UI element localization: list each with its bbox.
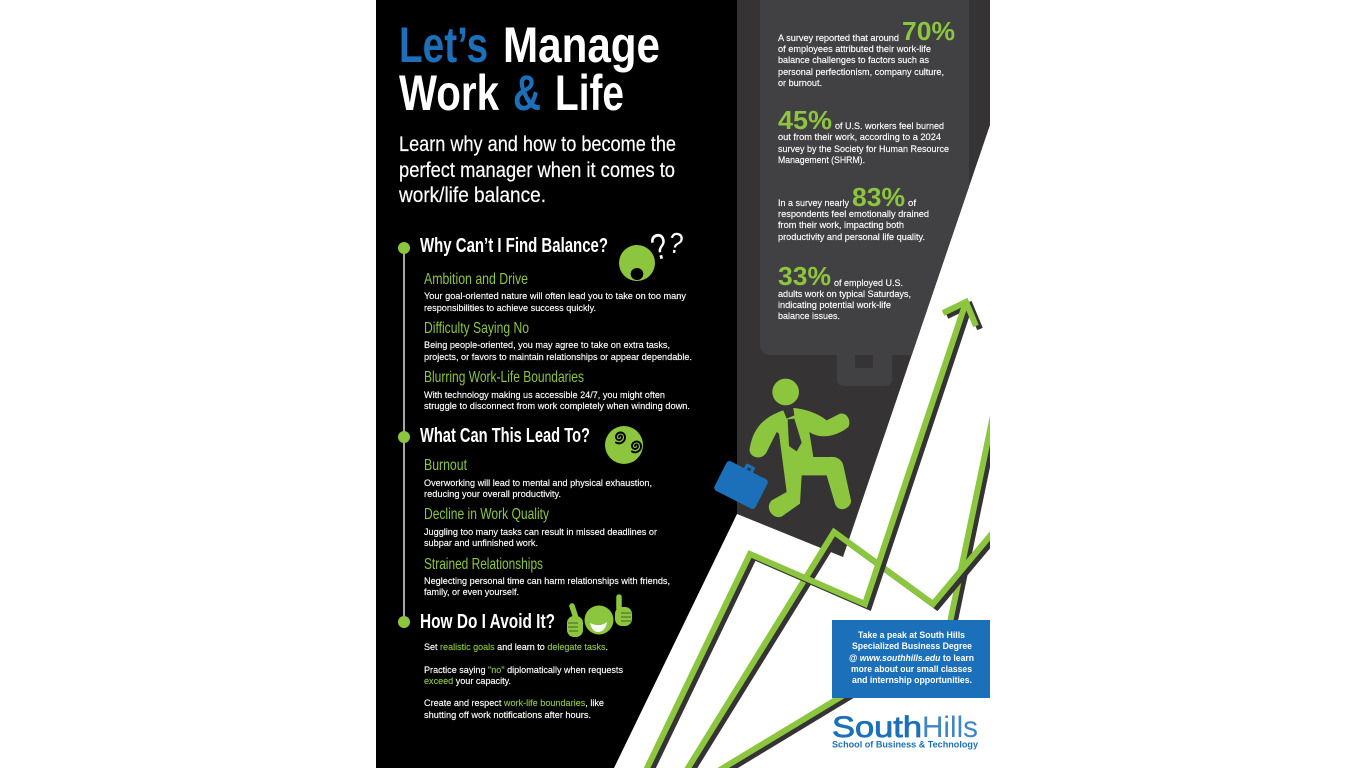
heading: what can this lead to: What Can This Lead To? [420,424,590,447]
panel: blue call to action box: Specialized Business Degree [852,641,972,652]
icon: confused face with question marks [619,232,683,281]
stat: 33 percent: 33% [778,263,831,291]
stat: 70 percent: 70% [902,18,955,46]
panel: blue call to action box: and internship opportunities. [852,675,972,686]
section text: how do I avoid it: Practice saying "no" diplomatically when requests [424,664,623,675]
stat: 83 percent: 83% [852,184,905,212]
stat: 70 percent: or burnout. [778,77,822,88]
stat: 70 percent: personal perfectionism, company culture, [778,66,944,77]
logo: South Hills School of Business and Technology: Hills [922,711,978,744]
section text: why can't I find balance: Ambition and Drive [424,271,528,288]
logo: South Hills School of Business and Technology: South [832,711,922,744]
title: Manage [503,17,660,73]
chart: rising trend line three [717,416,990,768]
section text: why can't I find balance: struggle to disconnect from work completely when winding down. [424,400,690,411]
stat: 45 percent: out from their work, according to a 2024 [778,131,941,142]
section text: what can this lead to: Strained Relationships [424,556,543,573]
icon: blue briefcase [714,461,768,509]
section text: what can this lead to [424,457,670,597]
panel: blue call to action box: Take a peak at South Hills [858,630,965,641]
stat: 33 percent: of employed U.S. [834,277,903,288]
section text: what can this lead to: subpar and unfinished work. [424,537,538,548]
stat: 45 percent: 45% [778,107,832,135]
section text: why can't I find balance [424,271,692,411]
stat: 45 percent: Management (SHRM). [778,154,865,165]
stat: 83 percent: of [908,197,916,208]
section text: what can this lead to: Burnout [424,457,467,474]
stat: 70 percent: of employees attributed their work-life [778,43,931,54]
title: & [513,65,541,121]
section text: why can't I find balance: Your goal-oriented nature will often lead you to take on too many [424,290,686,301]
section text: why can't I find balance: Being people-oriented, you may agree to take on extra tasks, [424,339,670,350]
section text: why can't I find balance: With technology making us accessible 24/7, you might often [424,389,665,400]
section text: how do I avoid it: shutting off work notifications after hours. [424,709,591,720]
heading: how do I avoid it: How Do I Avoid It? [420,610,555,633]
section text: how do I avoid it: Set realistic goals and learn to delegate tasks. [424,641,608,652]
chart: rising trend line two [675,524,1004,768]
stat: 33 percent: indicating potential work-life [778,299,891,310]
subtitle text block: Learn why and how to become the [399,132,676,156]
arrow: rising trend line one with arrowhead [637,302,980,768]
section text: how do I avoid it [424,641,623,720]
icon: confused face with question marks: ? [646,225,672,268]
stat: 33 percent: adults work on typical Saturdays, [778,288,911,299]
stat: 45 percent: of U.S. workers feel burned [835,120,944,131]
title: Work [399,65,499,121]
section text: why can't I find balance: projects, or favors to maintain relationships or appear dependable. [424,351,692,362]
stat: 70 percent: A survey reported that around [778,32,899,43]
subtitle text block: perfect manager when it comes to [399,158,675,182]
panel: dark grey right background [737,0,990,557]
section text: why can't I find balance: Difficulty Saying No [424,320,529,337]
icon: dizzy face with spiral eyes [605,426,643,464]
section text: what can this lead to: family, or even yourself. [424,586,519,597]
panel: blue call to action box: @ www.southhills.edu to learn [849,653,974,664]
panel: black left background [376,0,737,768]
panel: statistics card with clip [760,0,969,386]
stat: 83 percent: from their work, impacting both [778,219,904,230]
section text: what can this lead to: Neglecting personal time can harm relationships with friends, [424,575,670,586]
section text: why can't I find balance: responsibilities to achieve success quickly. [424,302,596,313]
stat: 33 percent [778,263,911,321]
stat: 45 percent: survey by the Society for Human Resource [778,143,949,154]
heading: why can't I find balance: Why Can’t I Find Balance? [420,234,608,257]
section text: how do I avoid it: Create and respect work-life boundaries, like [424,697,604,708]
section text: what can this lead to: reducing your overall productivity. [424,488,561,499]
section text: what can this lead to: Overworking will lead to mental and physical exhaustion, [424,477,652,488]
title: Life [555,65,624,121]
timeline with three node dots [398,242,410,628]
icon: confused face with question marks: ? [666,227,685,261]
section text: what can this lead to: Decline in Work Quality [424,506,549,523]
logo: South Hills School of Business and Technology [832,715,978,750]
stat: 33 percent: balance issues. [778,310,840,321]
section text: why can't I find balance: Blurring Work-Life Boundaries [424,369,584,386]
subtitle text block: work/life balance. [398,183,546,207]
panel: blue call to action box [832,620,990,698]
stat: 45 percent [778,107,949,165]
stat: 83 percent [778,184,929,242]
stat: 70 percent [778,18,955,88]
icon: smiling face with two thumbs up [567,597,632,637]
panel: blue call to action box: more about our small classes [851,664,972,675]
logo: South Hills School of Business and Technology: School of Business & Technology [832,740,979,750]
stat: 70 percent: balance challenges to factors such as [778,54,929,65]
title [399,28,658,110]
stat: 83 percent: productivity and personal life quality. [778,231,925,242]
stat: 83 percent: In a survey nearly [778,197,849,208]
title: Let’s [399,17,488,73]
stat: 83 percent: respondents feel emotionally drained [778,208,929,219]
icon: running businessman [750,379,851,517]
section text: how do I avoid it: exceed your capacity. [424,675,511,686]
subtitle text block [398,135,676,202]
section text: what can this lead to: Juggling too many tasks can result in missed deadlines or [424,526,657,537]
